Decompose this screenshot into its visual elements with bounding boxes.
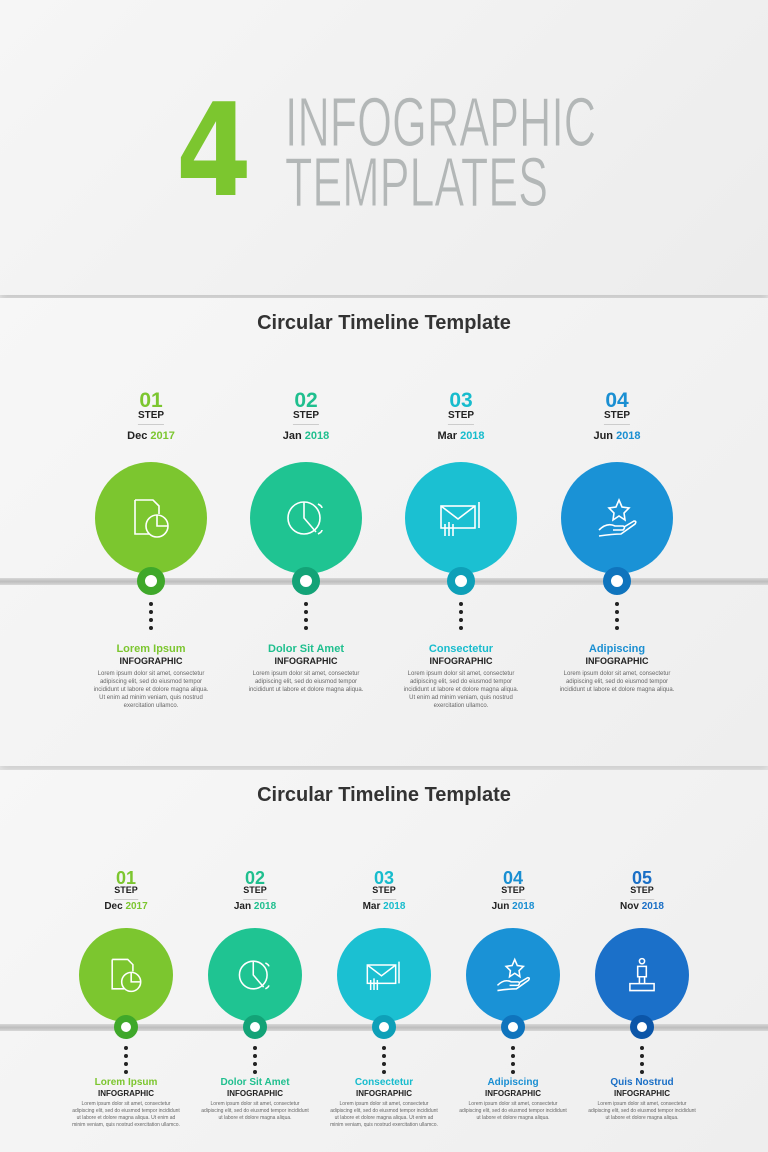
step 1: Dec 2017 — [127, 430, 175, 442]
step 3: Mar 2018 — [363, 901, 405, 912]
step 2: 02 — [294, 389, 318, 412]
step 2: Lorem ipsum dolor sit amet, consectetur adipiscing elit, sed do eiusmod tempor incididunt ut labore et dolore magna aliqua. — [249, 671, 363, 693]
step 2: Jan 2018 — [234, 901, 276, 912]
step 4: Lorem ipsum dolor sit amet, consectetur adipiscing elit, sed do eiusmod tempor incididunt ut labore et dolore magna aliqua. — [459, 1101, 567, 1121]
step 4: Lorem ipsum dolor sit amet, consectetur adipiscing elit, sed do eiusmod tempor incididunt ut labore et dolore magna aliqua. — [560, 671, 674, 693]
step 2: INFOGRAPHIC — [227, 1089, 283, 1098]
step 4: STEP — [604, 410, 630, 421]
step 1: 01 — [139, 389, 163, 412]
step 3: Lorem ipsum dolor sit amet, consectetur adipiscing elit, sed do eiusmod tempor incididunt ut labore et dolore magna aliqua. Ut enim ad minim veniam, quis nostrud exercitation ullamco. — [404, 671, 518, 709]
step 5: STEP — [630, 885, 654, 895]
step 1: STEP — [114, 885, 138, 895]
title: infographic templates: TEMPLATES — [285, 143, 548, 221]
step 1: INFOGRAPHIC — [120, 656, 182, 666]
step 3: STEP — [448, 410, 474, 421]
step 5: 05 — [632, 868, 652, 888]
big number 4: 4 — [176, 77, 252, 226]
step 4: STEP — [501, 885, 525, 895]
step 4: Jun 2018 — [593, 430, 641, 442]
step 1: 01 — [116, 868, 136, 888]
step 1: Lorem ipsum dolor sit amet, consectetur adipiscing elit, sed do eiusmod tempor incididunt ut labore et dolore magna aliqua. Ut enim ad minim veniam, quis nostrud exercitation ullamco. — [72, 1101, 180, 1128]
panel: timeline 5 steps — [0, 770, 768, 1152]
step 3: Lorem ipsum dolor sit amet, consectetur adipiscing elit, sed do eiusmod tempor incididunt ut labore et dolore magna aliqua. Ut enim ad minim veniam, quis nostrud exercitation ullamco. — [330, 1101, 438, 1128]
heading: Circular Timeline Template — [257, 784, 511, 806]
step 4: Adipiscing — [487, 1077, 539, 1088]
step 1: Lorem ipsum dolor sit amet, consectetur adipiscing elit, sed do eiusmod tempor incididunt ut labore et dolore magna aliqua. Ut enim ad minim veniam, quis nostrud exercitation ullamco. — [94, 671, 208, 709]
step 3: INFOGRAPHIC — [430, 656, 492, 666]
step 4: 04 — [503, 868, 523, 888]
step 4: Adipiscing — [589, 643, 645, 655]
title: infographic templates: INFOGRAPHIC — [285, 83, 596, 161]
step 4: 04 — [605, 389, 629, 412]
step 1: Lorem Ipsum — [116, 643, 186, 655]
step 1: STEP — [138, 410, 164, 421]
step 1 — [72, 868, 180, 1128]
step 4: INFOGRAPHIC — [586, 656, 648, 666]
step 1: Dec 2017 — [104, 901, 148, 912]
step 3: STEP — [372, 885, 396, 895]
step 2: STEP — [293, 410, 319, 421]
step 2: STEP — [243, 885, 267, 895]
step 1 — [94, 389, 208, 709]
step 3: INFOGRAPHIC — [356, 1089, 412, 1098]
step 2: Dolor Sit Amet — [220, 1077, 290, 1088]
step 3: Mar 2018 — [437, 430, 485, 442]
step 5 — [588, 868, 696, 1121]
step 3: Consectetur — [355, 1077, 413, 1088]
step 3 — [404, 389, 518, 709]
panel: timeline 4 steps — [0, 298, 768, 766]
heading: Circular Timeline Template — [257, 312, 511, 334]
step 2 — [249, 389, 363, 693]
step 3: 03 — [449, 389, 473, 412]
step 5: Quis Nostrud — [610, 1077, 674, 1088]
step 3 — [330, 868, 438, 1128]
step 4 — [459, 868, 567, 1121]
step 5: INFOGRAPHIC — [614, 1089, 670, 1098]
step 4 — [560, 389, 674, 693]
step 2 — [201, 868, 309, 1121]
step 3: Consectetur — [429, 643, 493, 655]
step 2: Jan 2018 — [283, 430, 329, 442]
step 4: Jun 2018 — [492, 901, 534, 912]
title: infographic templates — [285, 83, 596, 221]
step 2: INFOGRAPHIC — [274, 656, 338, 666]
step 5: Lorem ipsum dolor sit amet, consectetur adipiscing elit, sed do eiusmod tempor incididunt ut labore et dolore magna aliqua. — [588, 1101, 696, 1121]
step 1: INFOGRAPHIC — [98, 1089, 154, 1098]
step 2: 02 — [245, 868, 265, 888]
header panel — [0, 0, 768, 295]
step 2: Dolor Sit Amet — [268, 643, 344, 655]
step 4: INFOGRAPHIC — [485, 1089, 541, 1098]
step 3: 03 — [374, 868, 394, 888]
step 5: Nov 2018 — [620, 901, 664, 912]
step 2: Lorem ipsum dolor sit amet, consectetur adipiscing elit, sed do eiusmod tempor incididunt ut labore et dolore magna aliqua. — [201, 1101, 309, 1121]
step 1: Lorem Ipsum — [95, 1077, 157, 1088]
